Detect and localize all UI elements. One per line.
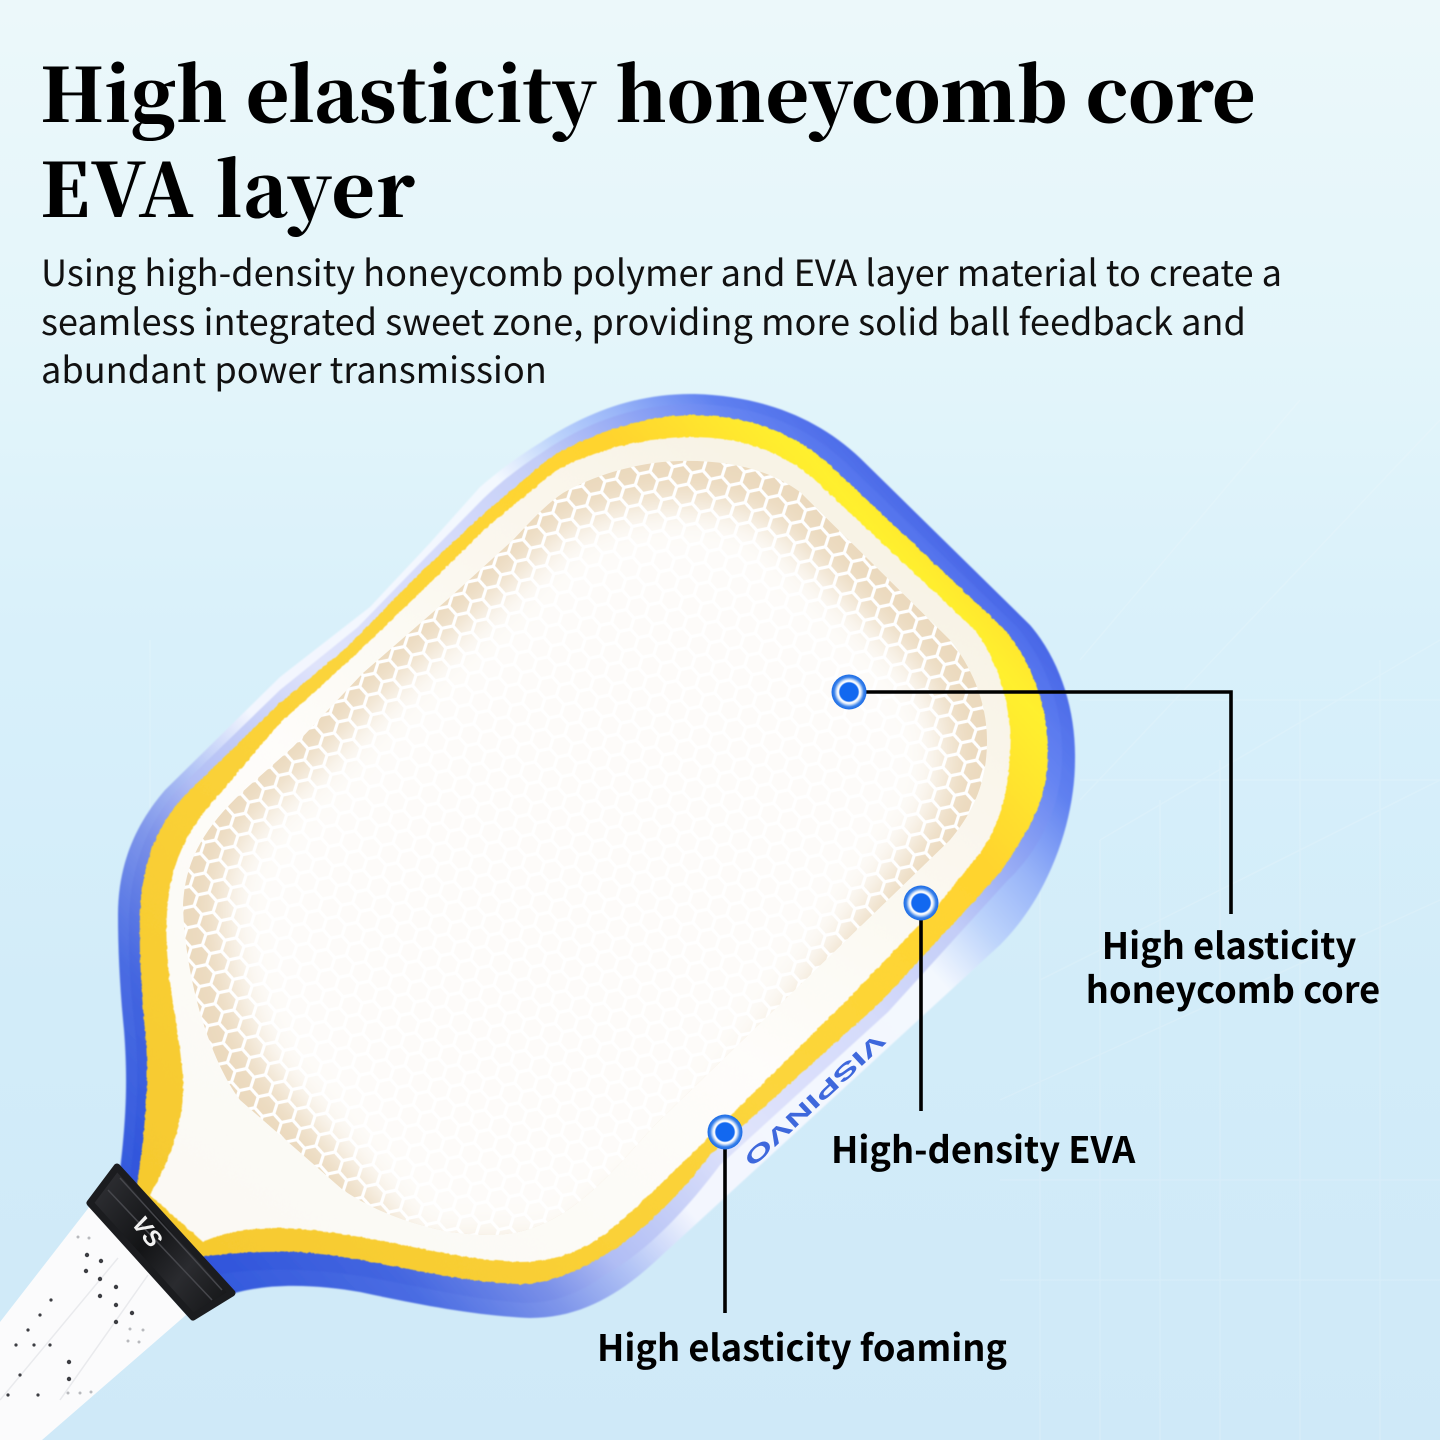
white EVA layer	[150, 437, 1010, 1262]
description: seamless integrated sweet zone, providing more solid ball feedback and	[41, 294, 1246, 346]
collar	[90, 1167, 232, 1317]
description	[41, 245, 1282, 394]
marker: honeycomb core	[832, 674, 866, 710]
callout line: foaming	[723, 1132, 727, 1313]
paddle	[0, 394, 1075, 1440]
background grid lines	[150, 400, 1440, 1440]
label: foaming: High elasticity foaming	[597, 1320, 1007, 1372]
label: honeycomb core: High elasticity	[1102, 918, 1356, 970]
collar logo: VS	[126, 1211, 167, 1253]
description: abundant power transmission	[41, 342, 547, 394]
title	[40, 38, 1256, 239]
inner frame tint	[129, 404, 1062, 1303]
callout line: EVA	[919, 903, 923, 1111]
yellow foam layer	[137, 415, 1048, 1284]
marker: foaming	[708, 1114, 742, 1150]
honeycomb core	[183, 460, 987, 1235]
handle grip	[0, 1206, 186, 1440]
title: High elasticity honeycomb core	[40, 38, 1256, 144]
label: honeycomb core	[1086, 918, 1380, 1014]
title: EVA layer	[40, 133, 416, 239]
label: EVA: High-density EVA	[831, 1122, 1135, 1174]
marker: EVA	[904, 886, 938, 920]
callout line: honeycomb core	[850, 692, 1231, 914]
outer blue frame	[118, 394, 1075, 1318]
label: honeycomb core: honeycomb core	[1086, 962, 1380, 1014]
paddle brand text: VISPINVO	[739, 1028, 889, 1171]
description: Using high-density honeycomb polymer and EVA layer material to create a	[41, 245, 1282, 297]
